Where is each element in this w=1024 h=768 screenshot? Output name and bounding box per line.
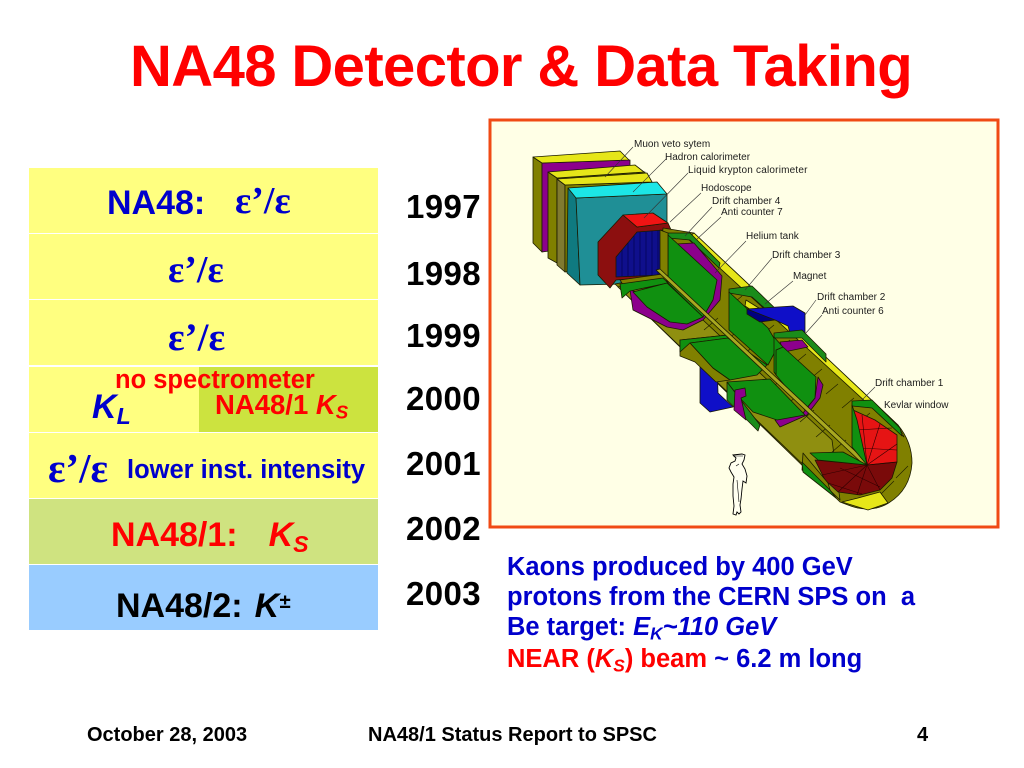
drift chamber 2 and anti counter (727, 330, 826, 431)
label: hodoscope: Hodoscope (701, 183, 752, 194)
line 1: Kaons produced by 400 GeV (507, 553, 853, 581)
text: 1997 epsilon ratio: ε’/ε (235, 180, 291, 222)
label: liquid krypton: Liquid krypton calorimeter (688, 165, 808, 176)
label: anti counter 7: Anti counter 7 (721, 207, 783, 218)
text: NA48/1 KS: NA48/1 KS (215, 389, 348, 423)
row 1997 (29, 168, 378, 233)
hodoscope octagon (598, 213, 672, 288)
row 2002 (29, 499, 378, 564)
text block: kaon beam description (507, 553, 916, 675)
year 1999: 1999 (406, 317, 481, 354)
footer page number: 4 (917, 724, 928, 746)
hadron calorimeter (548, 165, 652, 272)
text: KL: KL (92, 388, 131, 429)
text: 1998 epsilon ratio: ε’/ε (168, 249, 224, 291)
human figure for scale (729, 454, 747, 515)
leader lines (605, 147, 875, 400)
drift chamber 1 and kevlar window (802, 400, 902, 498)
year 1997: 1997 (406, 188, 481, 225)
label: drift chamber 4: Drift chamber 4 (712, 196, 781, 207)
muon veto system (533, 151, 630, 252)
detector drawing (533, 151, 912, 510)
beam pipe (656, 269, 868, 466)
label: drift chamber 2: Drift chamber 2 (817, 292, 886, 303)
row 1999 (29, 300, 378, 365)
line 2: protons from the CERN SPS on a (507, 583, 915, 611)
row 2003 (29, 565, 378, 630)
footer date: October 28, 2003 (87, 724, 247, 746)
label: magnet: Magnet (793, 271, 827, 282)
text: NA48/1 KS 2002: NA48/1: KS (111, 516, 309, 557)
text: NA48/2 K charged: NA48/2: K± (116, 587, 290, 625)
row 2000 NA48/1 KS cell (199, 367, 378, 432)
label: drift chamber 1: Drift chamber 1 (875, 378, 944, 389)
line 4: NEAR (KS) beam ~ 6.2 m long (507, 645, 862, 675)
label: anti counter 6: Anti counter 6 (822, 306, 884, 317)
row 2000 KL (29, 367, 378, 432)
component labels (634, 139, 949, 411)
row 1998 (29, 234, 378, 299)
year labels (406, 188, 481, 612)
row 2001 (29, 433, 378, 498)
drift chamber 4 (620, 230, 722, 330)
text: lower inst. intensity: lower inst. intensity (127, 456, 365, 484)
year 2002: 2002 (406, 510, 481, 547)
label: drift chamber 3: Drift chamber 3 (772, 250, 841, 261)
text: NA48 label: NA48: (107, 184, 205, 222)
year 2000: 2000 (406, 380, 481, 417)
year 1998: 1998 (406, 255, 481, 292)
year 2001: 2001 (406, 445, 481, 482)
liquid krypton calorimeter (567, 182, 667, 285)
text: 1999 epsilon ratio: ε’/ε (168, 316, 225, 359)
label: muon veto: Muon veto sytem (634, 139, 710, 150)
title: NA48 Detector & Data Taking (130, 34, 912, 99)
footer title: NA48/1 Status Report to SPSC (368, 724, 657, 746)
drift chamber 3 and magnet (680, 286, 805, 412)
label: kevlar window: Kevlar window (884, 400, 949, 411)
tube body (615, 228, 912, 510)
line 3: Be target: EK~110 GeV (507, 613, 776, 643)
text: no spectrometer: no spectrometer (115, 366, 315, 394)
panel: experiment timeline table (29, 168, 378, 630)
label: hadron calorimeter: Hadron calorimeter (665, 152, 751, 163)
text: 2001 epsilon ratio: ε’/ε (48, 445, 108, 491)
year 2003: 2003 (406, 575, 481, 612)
label: helium tank: Helium tank (746, 231, 800, 242)
